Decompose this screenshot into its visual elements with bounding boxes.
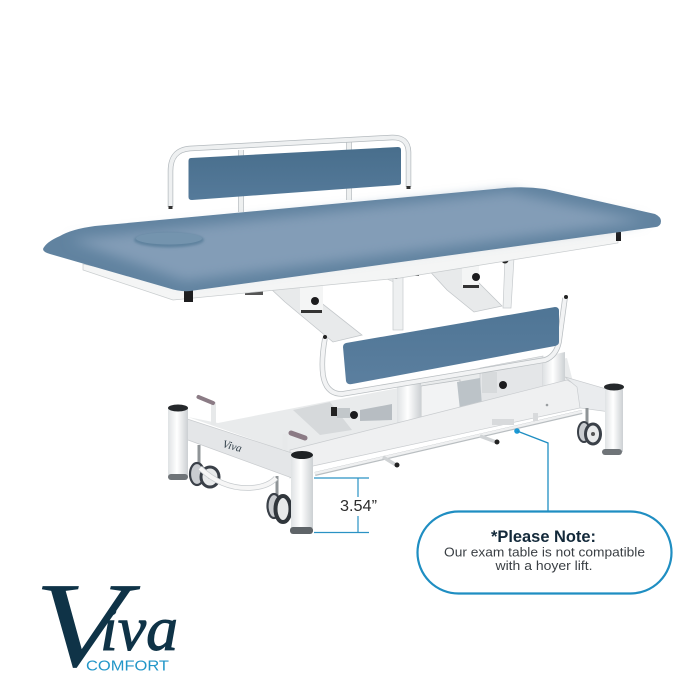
lower side cushion xyxy=(343,307,559,384)
mattress xyxy=(43,187,661,291)
left rail xyxy=(178,416,292,478)
front foot xyxy=(290,451,313,534)
note callout xyxy=(418,512,672,594)
handles xyxy=(198,397,305,450)
frame corner brackets xyxy=(184,232,621,302)
casters xyxy=(190,408,600,522)
lower side rail xyxy=(322,295,568,394)
back side rail xyxy=(168,137,410,212)
feet xyxy=(168,384,624,534)
scissor lift arms xyxy=(245,256,514,342)
table top frame xyxy=(83,232,618,300)
callout leader xyxy=(514,428,548,511)
base plate and mechanism xyxy=(188,356,575,456)
small brand mark on base: Viva xyxy=(221,438,243,455)
headrest cutout xyxy=(134,232,204,248)
note body: with a hoyer lift. xyxy=(494,558,592,573)
logo script: V xyxy=(34,558,141,693)
base frame xyxy=(178,377,610,478)
right rail xyxy=(565,377,610,412)
back side cushion xyxy=(188,147,401,200)
height value: 3.54” xyxy=(340,498,377,515)
central lift columns xyxy=(397,352,565,434)
note body: Our exam table is not compatible xyxy=(444,544,645,560)
front rail xyxy=(290,380,580,478)
height dimension xyxy=(314,478,377,532)
logo xyxy=(34,558,178,693)
logo script: iva xyxy=(100,593,178,664)
foot bar and pedals xyxy=(315,412,582,474)
right foot xyxy=(602,384,624,455)
logo wordmark: COMFORT xyxy=(86,658,169,674)
note heading: *Please Note: xyxy=(491,527,596,546)
back left foot xyxy=(168,404,188,480)
